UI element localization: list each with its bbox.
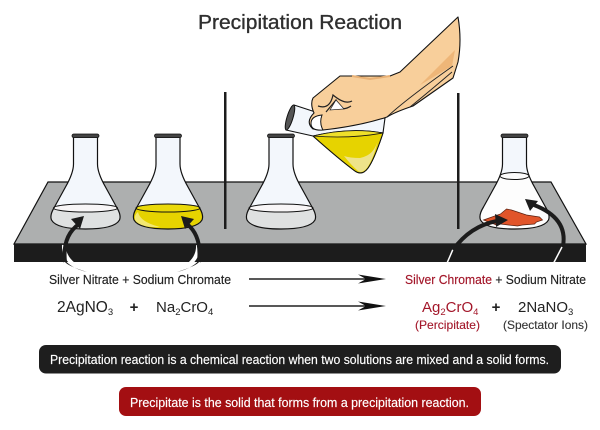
reactant formula: sodium chromate: CrO — [180, 299, 208, 316]
precipitate solid — [484, 209, 542, 226]
reactant formula: silver nitrate: 3 — [108, 307, 113, 318]
tilted flask with yellow solution — [283, 104, 385, 173]
arrow: formula equation — [249, 302, 386, 310]
callout: definition of precipitation reaction — [39, 345, 561, 374]
reactant formula: sodium chromate: Na — [156, 299, 175, 316]
title: Precipitation Reaction — [198, 11, 402, 34]
label: percipitate: (Percipitate) — [415, 318, 480, 332]
product formula: sodium nitrate: 2NaNO — [518, 299, 568, 316]
reactant formula: sodium chromate: 4 — [208, 307, 213, 318]
product formula: silver chromate: Ag — [422, 299, 440, 316]
arrow: sodium chromate to flask — [177, 216, 201, 272]
callout: definition of precipitate: Precipitate is the solid that forms from a precipitation reaction. — [130, 396, 469, 410]
table — [14, 182, 586, 262]
callout: definition of precipitation reaction: Precipitation reaction is a chemical reaction when two solutions are mixed and a solid forms. — [50, 353, 549, 367]
product formula: silver chromate: CrO — [446, 299, 473, 316]
arrow: silver nitrate to flask — [63, 216, 87, 272]
product formula: silver chromate: 4 — [473, 307, 478, 318]
arrow: silver chromate to precipitate — [444, 214, 508, 270]
products word equation: Silver Chromate + Sodium Nitrate — [405, 273, 586, 287]
divider left — [224, 92, 226, 229]
plus sign reactants: + — [130, 299, 139, 316]
reactants word equation: Silver Nitrate + Sodium Chromate — [49, 273, 231, 287]
reactant formula: silver nitrate: 2AgNO — [57, 299, 108, 316]
product formula: silver chromate: 2 — [440, 307, 446, 318]
reactant formula: sodium chromate: 2 — [175, 307, 180, 318]
flask: mixing — [246, 134, 316, 229]
flask: precipitate result — [480, 134, 549, 229]
arrow: sodium nitrate to solution — [525, 199, 564, 270]
product formula: sodium nitrate: 3 — [568, 307, 573, 318]
arrow: word equation — [249, 274, 386, 284]
callout: definition of precipitate — [119, 387, 481, 416]
plus sign products: + — [492, 299, 501, 316]
label: spectator ions: (Spectator Ions) — [503, 318, 588, 332]
hand — [309, 17, 460, 130]
flask: silver nitrate — [51, 134, 120, 229]
flask: sodium chromate — [133, 134, 203, 229]
divider right — [457, 93, 460, 229]
